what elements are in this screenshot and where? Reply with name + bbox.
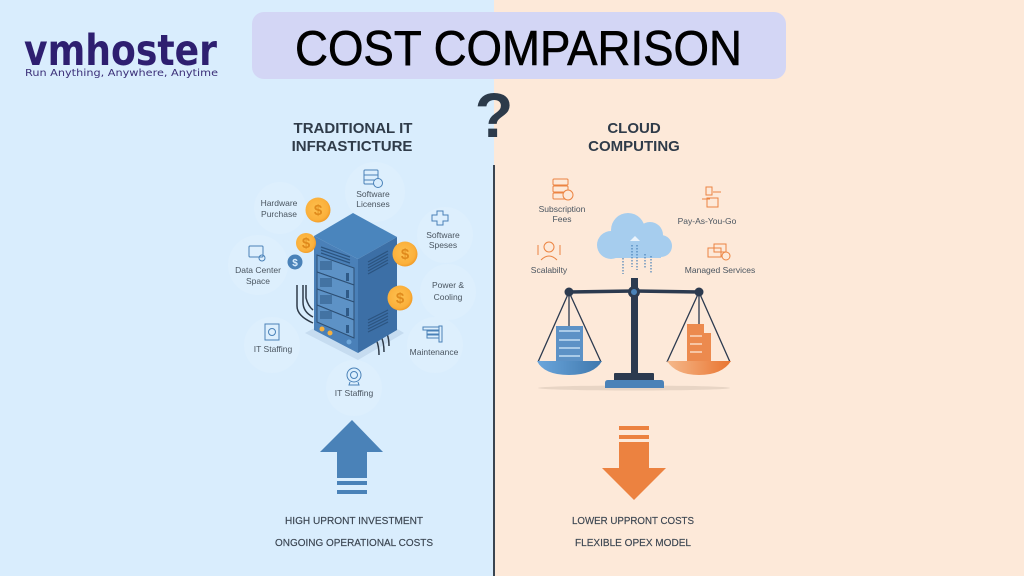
server illustration	[297, 213, 404, 360]
cost labels: traditional: Power &	[432, 280, 464, 290]
heading: traditional IT infrastructure: INFRASTICTURE	[292, 138, 412, 155]
cost labels: cloud: Pay-As-You-Go	[678, 216, 737, 226]
arrow up: high cost	[320, 420, 383, 494]
cost labels: traditional: Maintenance	[410, 347, 459, 357]
coins: $	[302, 235, 311, 252]
cost labels: cloud: Subscription	[539, 204, 586, 214]
cost labels: traditional: Purchase	[261, 209, 297, 219]
summary: cloud: FLEXIBLE OPEX MODEL	[575, 538, 691, 549]
summary: traditional	[275, 516, 433, 549]
cost labels: traditional: IT Staffing	[254, 344, 292, 354]
cost labels: traditional: IT Staffing	[335, 388, 373, 398]
icons: traditional	[249, 170, 448, 385]
summary: cloud: LOWER UPPRONT COSTS	[572, 516, 694, 527]
coins: $	[396, 290, 405, 307]
heading: traditional IT infrastructure: TRADITIONAL IT	[294, 120, 412, 137]
coins: $	[314, 202, 323, 219]
cost labels: cloud: Managed Services	[685, 265, 755, 275]
heading: cloud computing: CLOUD	[607, 120, 661, 137]
coins	[288, 198, 418, 310]
logo: Run Anything, Anywhere, Anytime	[25, 68, 218, 79]
cost labels: cloud: Fees	[553, 214, 571, 224]
cloud icon	[597, 213, 672, 274]
panel: label halos	[228, 162, 476, 416]
arrow down: low cost	[602, 426, 666, 500]
icons: cloud side	[538, 179, 730, 260]
coins: $	[401, 246, 410, 263]
cost labels: traditional: Data Center	[235, 265, 281, 275]
summary: cloud	[572, 516, 694, 549]
cost labels: traditional: Speses	[429, 240, 457, 250]
heading: traditional IT infrastructure	[292, 120, 412, 155]
cost labels: traditional	[235, 189, 464, 398]
logo: vmhoster	[24, 26, 218, 76]
cost labels: traditional: Software	[356, 189, 390, 199]
heading: cloud computing	[588, 120, 680, 155]
summary: traditional: HIGH UPRONT INVESTMENT	[285, 516, 423, 527]
cost labels: cloud	[531, 204, 755, 275]
cost labels: traditional: Space	[246, 276, 270, 286]
cost labels: traditional: Hardware	[261, 198, 298, 208]
coins: $	[292, 258, 298, 269]
cost labels: traditional: Cooling	[434, 292, 463, 302]
cost labels: traditional: Software	[426, 230, 460, 240]
title banner: COST COMPARISON	[295, 22, 742, 76]
centre divider	[493, 165, 495, 576]
scale	[537, 278, 731, 390]
heading: cloud computing: COMPUTING	[588, 138, 680, 155]
cost labels: cloud: Scalabilty	[531, 265, 568, 275]
cost labels: traditional: Licenses	[356, 199, 390, 209]
question mark: ?	[475, 81, 513, 151]
summary: traditional: ONGOING OPERATIONAL COSTS	[275, 538, 433, 549]
